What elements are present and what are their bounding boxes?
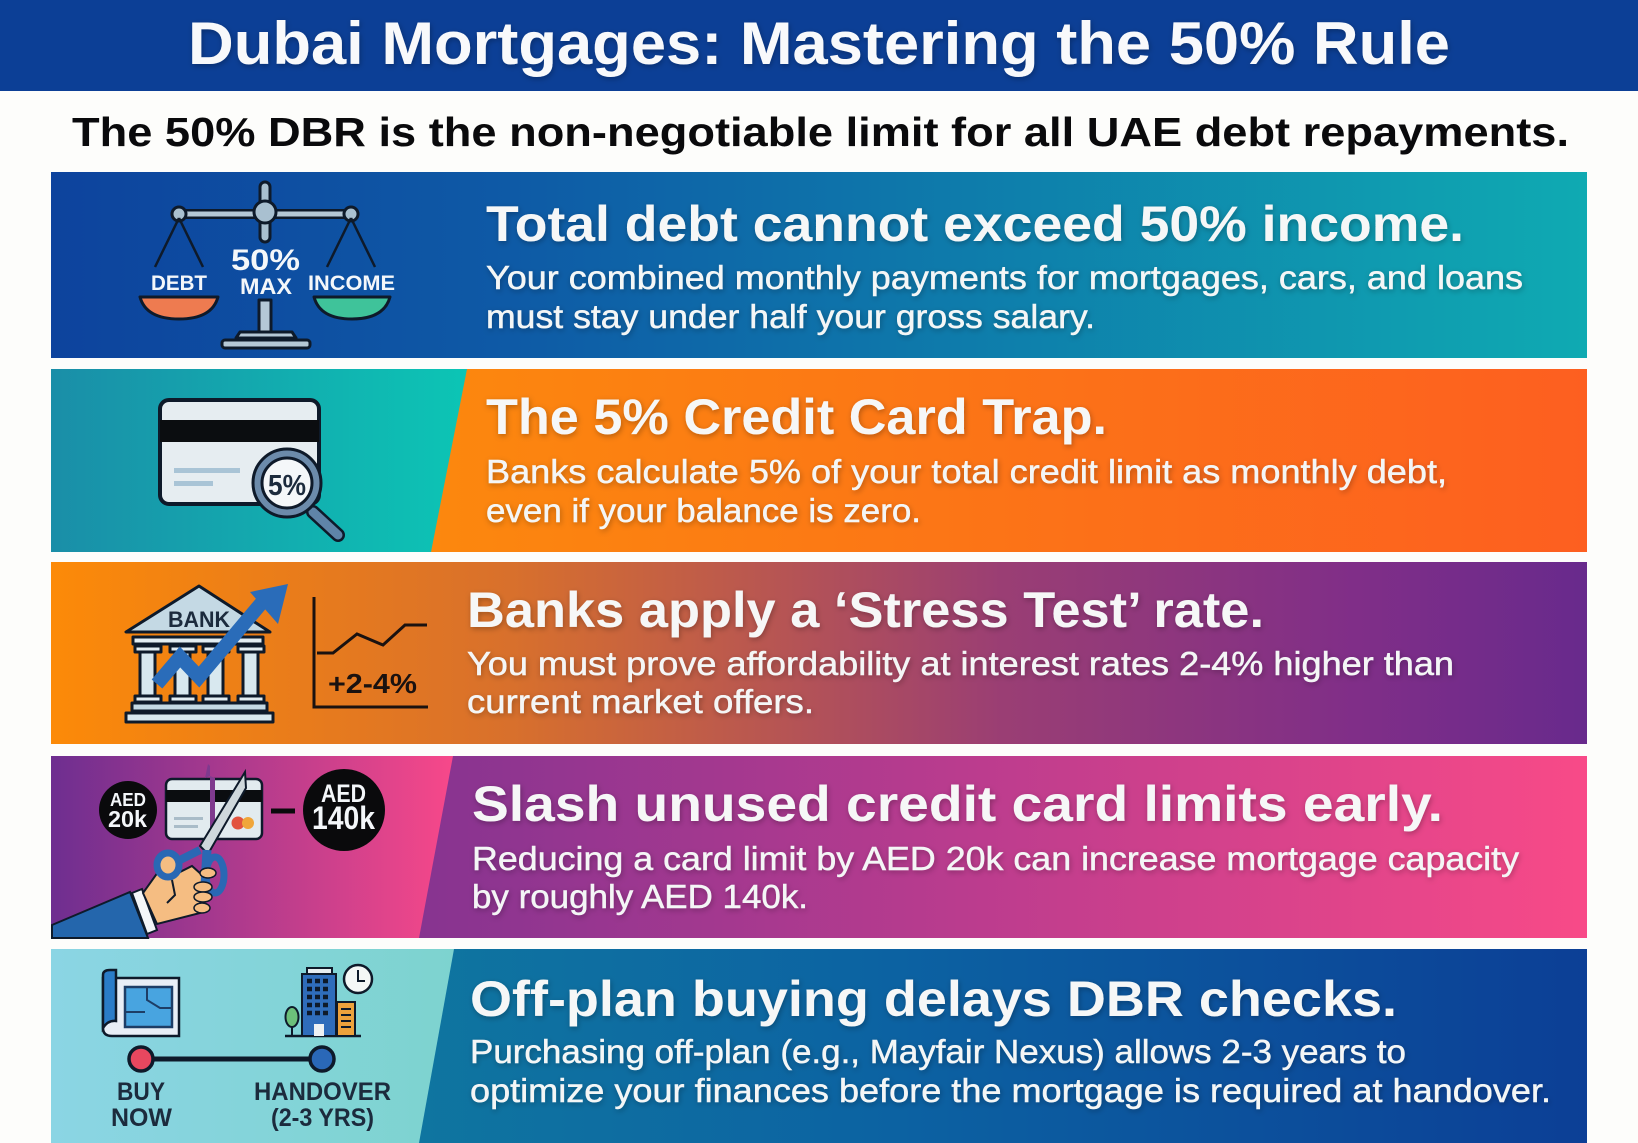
- text block: slash limits: by roughly AED 140k.: [472, 878, 808, 915]
- text block: off-plan: Purchasing off-plan (e.g., Mayfair Nexus) allows 2-3 years to: [470, 1033, 1406, 1070]
- badge: AED 20k: 20k: [108, 806, 147, 832]
- label: handover: [254, 1078, 391, 1132]
- badge: AED 140k: 140k: [312, 800, 375, 836]
- panel: credit card trap: [51, 369, 1587, 552]
- badge: AED 20k: AED: [110, 790, 146, 810]
- magnifier label: 5%: [268, 470, 306, 502]
- text block: credit card trap: Banks calculate 5% of your total credit limit as monthly debt,: [486, 453, 1447, 490]
- text block: off-plan: optimize your finances before the mortgage is required at handover.: [470, 1072, 1551, 1109]
- label: buy now: [111, 1078, 172, 1132]
- text block: total debt: Your combined monthly payments for mortgages, cars, and loans: [486, 259, 1523, 296]
- title: Dubai Mortgages: Mastering the 50% Rule: [188, 10, 1450, 77]
- text block: total debt: Total debt cannot exceed 50% income.: [486, 196, 1464, 252]
- subtitle: The 50% DBR is the non-negotiable limit for all UAE debt repayments.: [72, 109, 1569, 155]
- icon: cut card AED 20k to AED 140k: [52, 764, 385, 938]
- panel: stress test: [51, 562, 1587, 744]
- scale label: debt: DEBT: [151, 272, 207, 295]
- label: handover: HANDOVER: [254, 1078, 391, 1106]
- text block: credit card trap: even if your balance is zero.: [486, 492, 921, 529]
- text block: stress test: [467, 582, 1454, 720]
- text block: off-plan: [470, 971, 1551, 1109]
- panel: slash card limits: [51, 756, 1587, 938]
- text block: stress test: current market offers.: [467, 683, 814, 720]
- text block: slash limits: Slash unused credit card limits early.: [472, 776, 1443, 832]
- badge: AED 140k: AED: [321, 780, 366, 808]
- text block: total debt: must stay under half your gross salary.: [486, 298, 1095, 335]
- chart: rising rate line: [314, 597, 428, 707]
- icon: balance scale 50% max: [140, 182, 395, 348]
- badge: AED 140k: [303, 769, 385, 851]
- text block: stress test: Banks apply a ‘Stress Test’ rate.: [467, 582, 1264, 638]
- icon: credit card with magnifier: [160, 400, 338, 535]
- panel: off-plan buying: [51, 949, 1587, 1143]
- icon: hand holding scissors: [52, 850, 224, 938]
- scale label: 50% max: 50%: [231, 244, 300, 277]
- text block: slash limits: [472, 776, 1520, 915]
- header banner: [0, 0, 1638, 91]
- icon: blueprint: [103, 970, 179, 1036]
- bank label: BANK: [168, 607, 230, 632]
- scale label: income: INCOME: [308, 272, 395, 295]
- icon: bank with rising arrow: [126, 584, 288, 722]
- text block: slash limits: Reducing a card limit by AED 20k can increase mortgage capacity: [472, 840, 1520, 877]
- chart label: +2-4%: [328, 668, 417, 699]
- icon: balance scale 50% max: MAX: [240, 274, 292, 299]
- text block: total debt: [486, 196, 1523, 335]
- label: handover: (2-3 YRS): [271, 1104, 374, 1132]
- text block: credit card trap: [486, 389, 1447, 529]
- timeline: buy to handover: [129, 1047, 334, 1071]
- panel: total debt limit: [51, 172, 1587, 358]
- text block: off-plan: Off-plan buying delays DBR checks.: [470, 971, 1397, 1027]
- icon: finished building with clock: [285, 965, 372, 1036]
- label: buy now: NOW: [111, 1104, 172, 1132]
- text block: credit card trap: The 5% Credit Card Trap.: [486, 389, 1107, 445]
- text block: stress test: You must prove affordability at interest rates 2-4% higher than: [467, 645, 1454, 682]
- badge: AED 20k: [99, 781, 157, 839]
- label: buy now: BUY: [117, 1078, 165, 1106]
